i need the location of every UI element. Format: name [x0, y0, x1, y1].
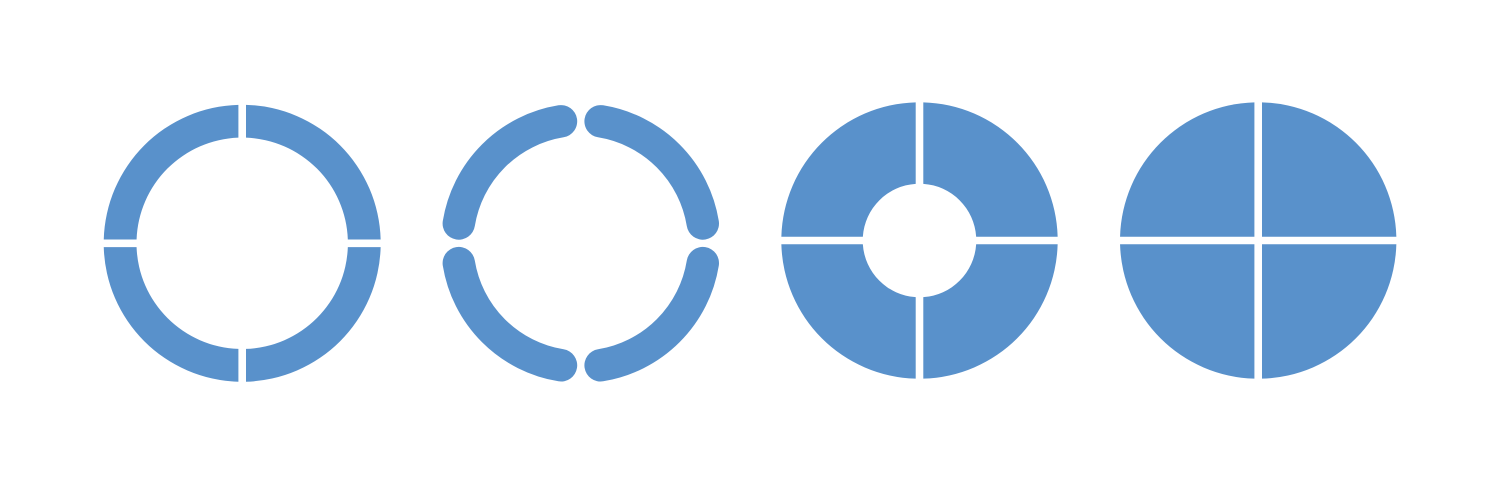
segment: bottom left — [781, 244, 916, 379]
segment: top right — [246, 105, 381, 240]
segment: top left — [104, 105, 238, 240]
panel: solid pie with four quadrants — [1120, 102, 1396, 379]
segment: top right — [923, 102, 1058, 237]
quadrant: bottom right — [1262, 244, 1396, 379]
segment: top left — [781, 102, 916, 237]
panel: thin ring with square-cut segments — [104, 105, 381, 382]
segment: bottom right — [246, 247, 381, 382]
segment: top right rounded — [601, 121, 703, 224]
quadrant: top left — [1120, 102, 1254, 237]
segment: bottom left rounded — [459, 263, 561, 365]
quadrant: bottom left — [1120, 244, 1254, 379]
segment: bottom right — [923, 244, 1058, 379]
segment: top left rounded — [459, 121, 561, 224]
segment: bottom right rounded — [601, 263, 703, 365]
panel: thin ring with rounded segments — [459, 121, 703, 365]
segment: bottom left — [104, 247, 238, 382]
quadrant: top right — [1262, 102, 1396, 237]
panel: thick donut with four segments — [781, 102, 1058, 379]
